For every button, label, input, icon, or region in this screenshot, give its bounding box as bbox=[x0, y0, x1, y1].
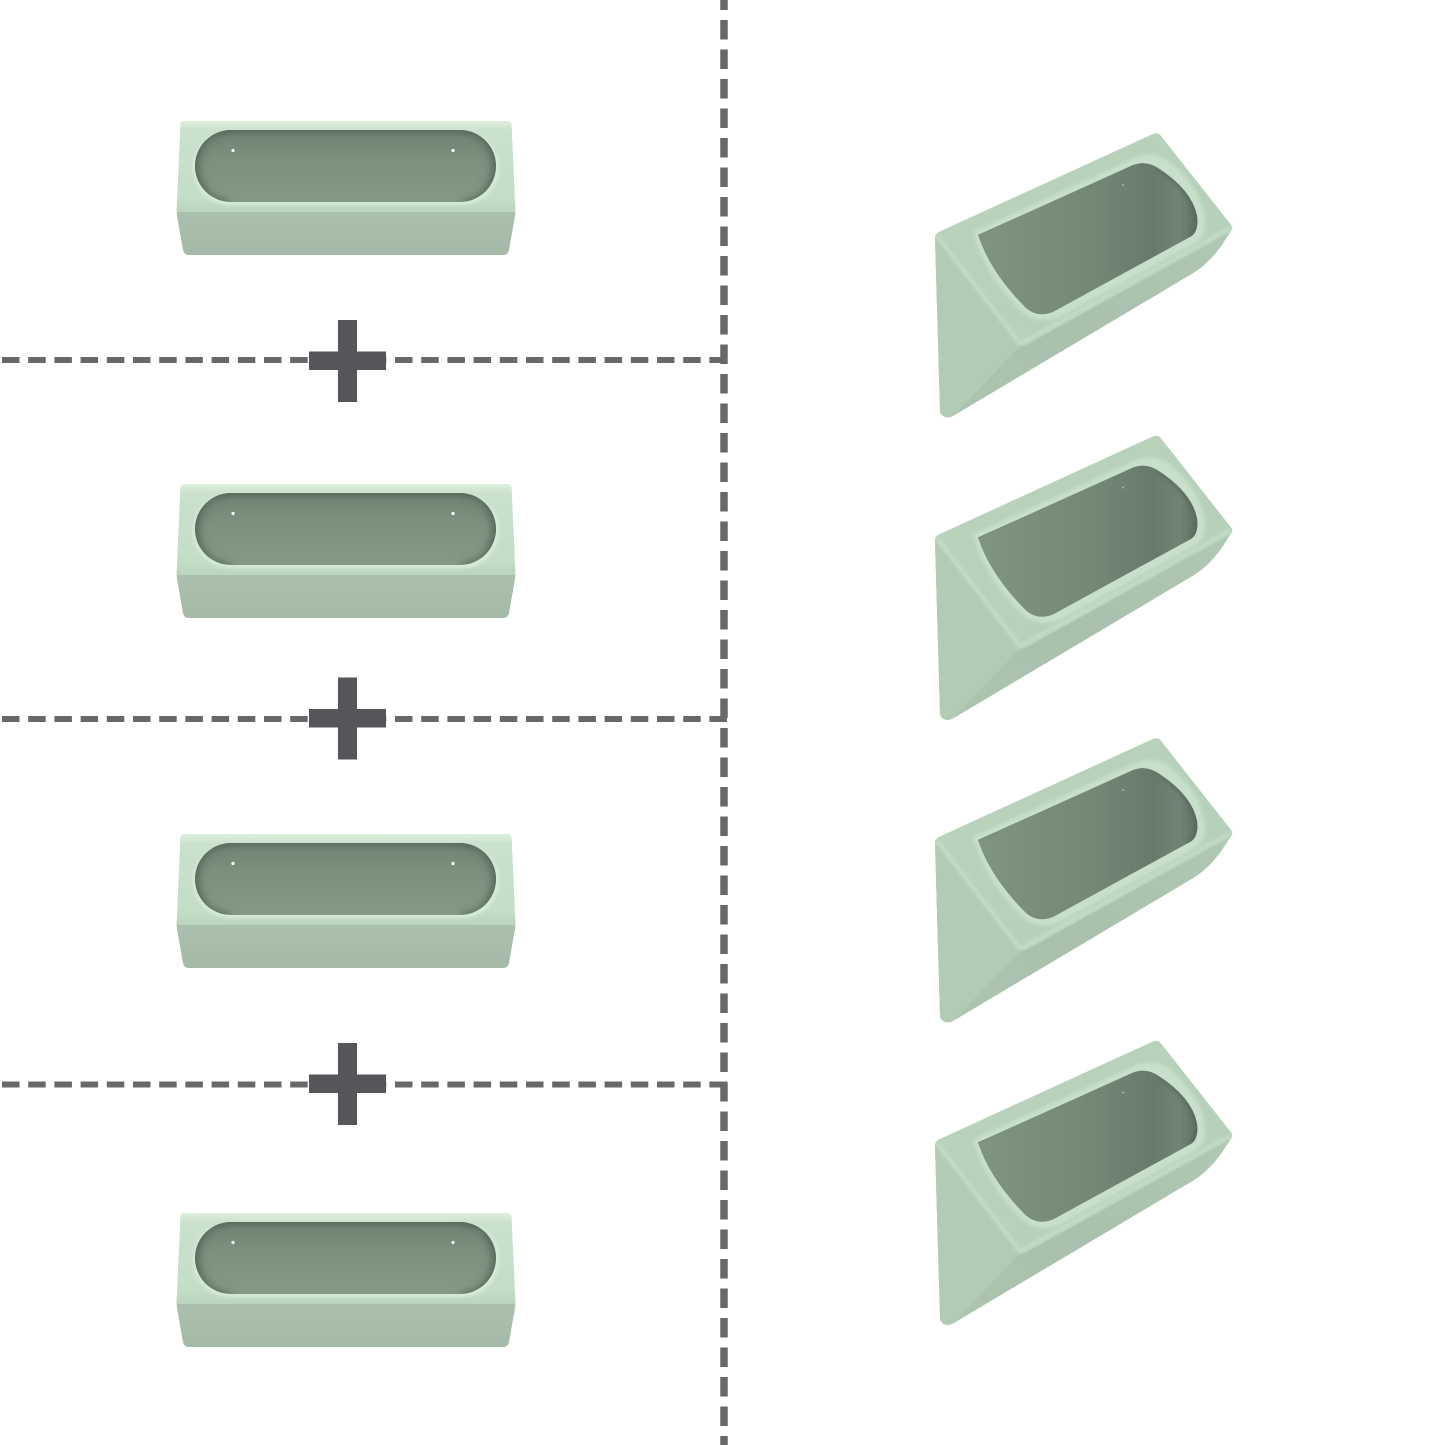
planter angled view 4 bbox=[935, 1041, 1232, 1325]
planter front view 1 bbox=[170, 121, 521, 255]
row divider 1 bbox=[2, 357, 727, 363]
planter front view 2 bbox=[170, 484, 521, 618]
icon: plus 2 bbox=[309, 678, 386, 760]
planter angled view 1 bbox=[935, 133, 1232, 418]
vertical dashed divider bbox=[720, 0, 728, 1445]
planter angled view 3 bbox=[935, 738, 1232, 1022]
planter front view 4 bbox=[170, 1213, 521, 1347]
row divider 2 bbox=[2, 716, 727, 722]
icon: plus 3 bbox=[309, 1043, 386, 1125]
icon: plus 1 bbox=[309, 320, 386, 402]
planter front view 3 bbox=[170, 834, 521, 968]
planter angled view 2 bbox=[935, 436, 1232, 720]
row divider 3 bbox=[2, 1082, 727, 1088]
